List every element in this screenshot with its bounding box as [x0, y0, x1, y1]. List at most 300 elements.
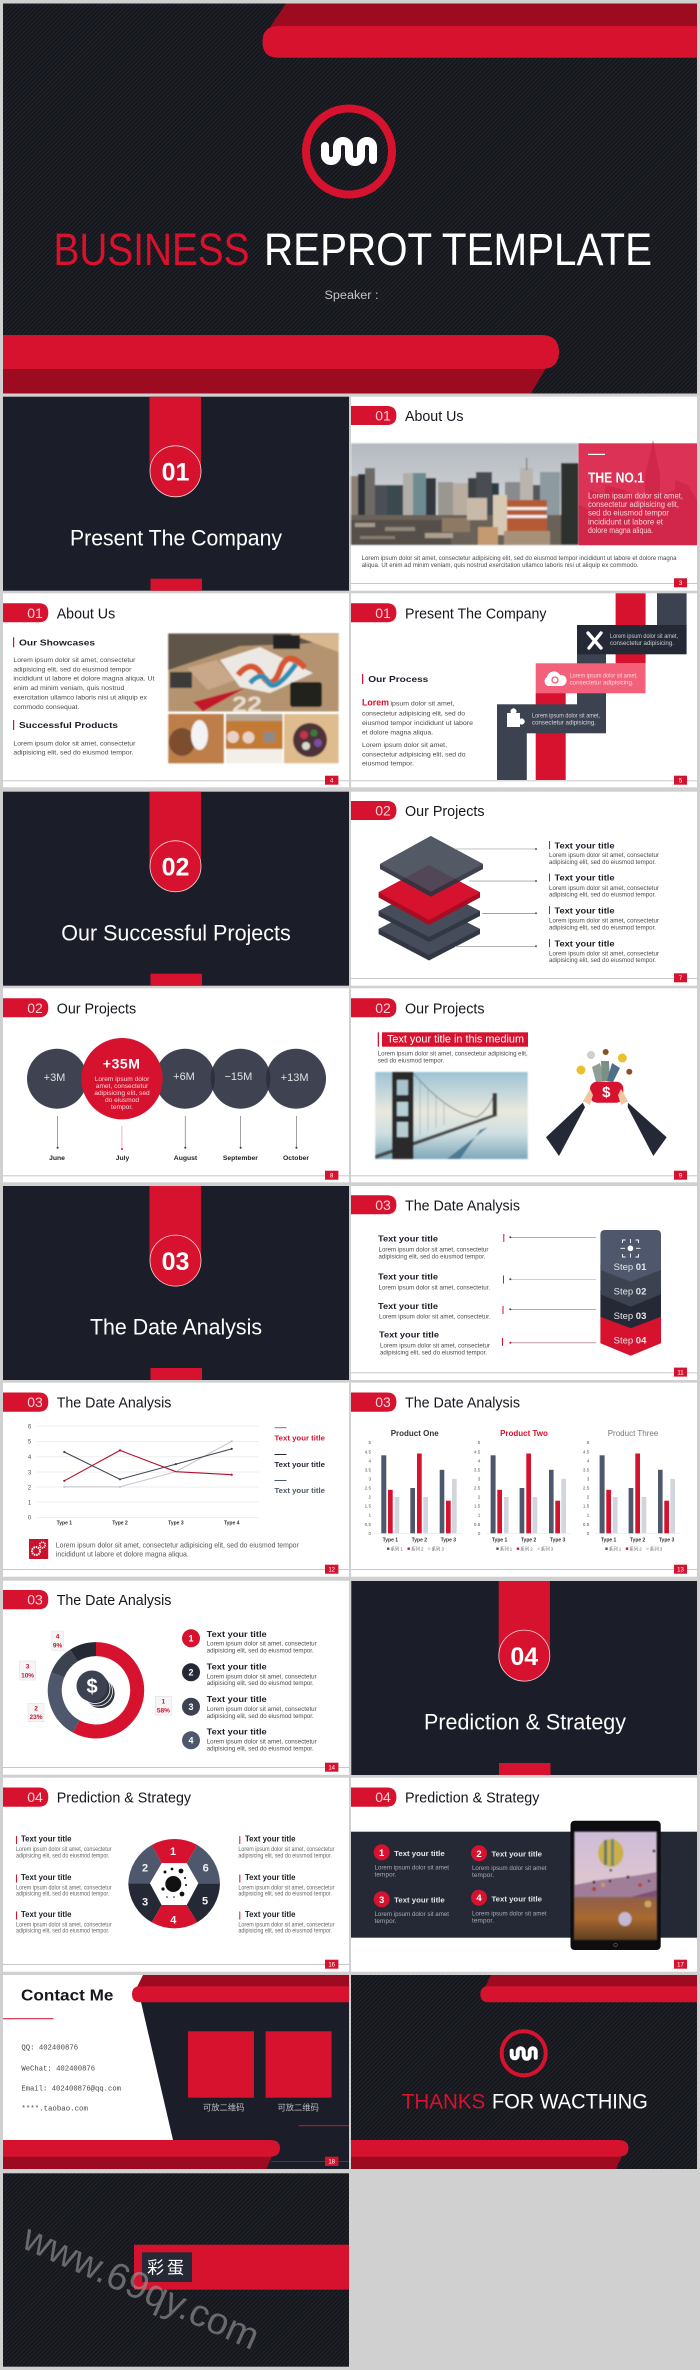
- list item 1: Text your title: [378, 1234, 438, 1244]
- month markers: June: [49, 1155, 65, 1162]
- slide 15: section 04: [351, 1581, 697, 1775]
- list item 1: 1: [188, 1634, 194, 1644]
- line chart: 2: [28, 1485, 32, 1491]
- bar chart: product one: 3: [368, 1476, 371, 1482]
- list item 2: adipisicing elit, sed do eiusmod tempor.: [207, 1680, 314, 1687]
- footer and page number: [351, 1171, 697, 1180]
- slide 2: section 01: [3, 397, 349, 591]
- bar chart: product three: 系列 2: [629, 1546, 642, 1552]
- text block: our process: consectetur adipisicing elit, sed do: [362, 711, 465, 718]
- section title: Prediction & Strategy: [424, 1710, 626, 1735]
- footer and page number: 18: [328, 2160, 336, 2166]
- bar chart: product three: 2: [587, 1495, 590, 1500]
- hexagon wheel: 3: [142, 1897, 148, 1909]
- item 2: [471, 1845, 547, 1879]
- header tab: 03: [27, 1394, 43, 1410]
- icon: coin stack: $: [86, 1676, 98, 1698]
- list item 2: Lorem ipsum dolor sit amet, consectetur.: [378, 1284, 490, 1291]
- heading: Prediction & Strategy: [405, 1790, 540, 1806]
- bar chart: product three: 4: [587, 1458, 590, 1463]
- circle chain: −15M: [224, 1071, 252, 1083]
- list item 1: Lorem ipsum dolor sit amet, consectetur: [207, 1640, 317, 1647]
- icon: logo: [306, 108, 392, 194]
- bar chart: product three: Product Three: [608, 1429, 659, 1438]
- red info panel: [578, 440, 697, 545]
- body text: aliqua. Ut enim ad minim veniam, quis nostrud exercitation ullamco laboris nisi ut aliquip ex commodo.: [362, 562, 639, 569]
- header tab: [351, 998, 396, 1017]
- bar chart: product three: 1.5: [583, 1504, 590, 1509]
- bar chart: product one: 0.5: [365, 1522, 371, 1527]
- step stack: Step 04: [614, 1335, 647, 1346]
- right column items: Text your title: [245, 1834, 296, 1844]
- item 3: tempor.: [374, 1918, 397, 1925]
- bar chart: product one: 0: [368, 1531, 371, 1536]
- list item 1: Lorem ipsum dolor sit amet, consectetur: [549, 852, 660, 859]
- step box: cloud: Lorem ipsum dolor sit amet,: [570, 672, 638, 679]
- bar chart: product two: 2.5: [474, 1486, 481, 1490]
- footer and page number: 13: [677, 1568, 684, 1574]
- slide 7: our projects layers: [351, 792, 697, 986]
- text block: our process: [362, 674, 473, 768]
- list item 2: Lorem ipsum dolor sit amet, consectetur: [549, 885, 660, 892]
- text block: our process: Our Process: [368, 674, 429, 684]
- bar chart: product three: 5: [587, 1440, 590, 1445]
- list item 3: 3: [188, 1702, 194, 1712]
- footer and page number: 8: [330, 1173, 334, 1179]
- bar chart: product two: Type 1: [492, 1538, 508, 1544]
- item 1: Text your title: [394, 1849, 445, 1858]
- header tab: 04: [375, 1789, 391, 1805]
- bar chart: product one: 1.5: [365, 1504, 371, 1509]
- list item 2: [182, 1661, 317, 1687]
- line chart: Type 4: [224, 1521, 240, 1527]
- bar chart: product three: 4.5: [583, 1449, 590, 1454]
- white panel: [3, 1975, 173, 2140]
- bar chart: product one: 系列 3: [432, 1546, 445, 1552]
- hexagon wheel: 2: [142, 1863, 148, 1875]
- bottom red band: [3, 335, 559, 394]
- right column items: Lorem ipsum dolor sit amet, consectetur: [238, 1847, 334, 1853]
- step box: cloud: consectetur adipisicing.: [570, 679, 634, 686]
- step box: tools: consectetur adipisicing.: [610, 640, 674, 647]
- bar chart: product one: 4: [368, 1458, 371, 1463]
- text block: our process: eiusmod tempor incididunt ut labore: [362, 720, 473, 727]
- accent line: [3, 2018, 54, 2019]
- header tab: 03: [375, 1197, 391, 1213]
- body text: Lorem ipsum dolor sit amet, consectetur adipisicing elit,: [378, 1051, 528, 1058]
- header tab: 01: [375, 408, 391, 424]
- slide 3: about us city: [351, 397, 697, 591]
- month markers: [49, 1116, 309, 1162]
- line chart: Type 3: [168, 1521, 184, 1527]
- step box: tools: [577, 625, 687, 654]
- heading: The Date Analysis: [57, 1592, 171, 1609]
- speaker label: Speaker :: [324, 290, 378, 302]
- donut labels: 1: [162, 1698, 166, 1706]
- list item 1: Text your title: [554, 840, 615, 850]
- list item 1: adipisicing elit, sed do eiusmod tempor.: [378, 1253, 486, 1260]
- bar chart: product one: 3.5: [365, 1467, 371, 1472]
- right column items: Text your title: [245, 1909, 296, 1919]
- contact details: ****.taobao.com: [21, 2106, 88, 2114]
- text block: our process: eiusmod tempor.: [362, 761, 414, 768]
- contact details: WeChat: 402400876: [21, 2065, 95, 2073]
- text block: our showcases: adipisicing elit, sed do eiusmod tempor: [13, 666, 132, 673]
- item 4: Lorem ipsum dolor sit amet: [472, 1910, 547, 1917]
- bar chart: product two: 2: [478, 1495, 481, 1500]
- list item 4: Lorem ipsum dolor sit amet, consectetur: [549, 950, 660, 957]
- footer and page number: [271, 2157, 349, 2166]
- item 4: [471, 1890, 547, 1924]
- item 3: [374, 1891, 449, 1925]
- number badge: 04: [510, 1643, 538, 1671]
- header tab: [351, 801, 396, 820]
- header tab: 03: [375, 1394, 391, 1410]
- item 3: Lorem ipsum dolor sit amet: [374, 1911, 449, 1918]
- thumbnail: mouse: [168, 714, 224, 763]
- list item 4: Lorem ipsum dolor sit amet, consectetur: [207, 1738, 317, 1745]
- slide 18: contact me: [3, 1975, 349, 2169]
- circle chain: tempor.: [111, 1104, 133, 1111]
- bar chart: product two: Product Two: [500, 1429, 548, 1438]
- header tab: 02: [375, 802, 391, 818]
- list item 1: [182, 1629, 317, 1654]
- caption: [56, 1540, 299, 1559]
- step stack: Step 02: [614, 1286, 646, 1297]
- hexagon wheel: 1: [170, 1846, 176, 1858]
- QR placeholder 2: 可放二维码: [277, 2103, 319, 2113]
- list item 1: adipisicing elit, sed do eiusmod tempor.: [207, 1647, 314, 1654]
- chart legend: Text your title: [274, 1460, 325, 1469]
- footer and page number: [351, 776, 697, 785]
- footer and page number: [3, 1171, 349, 1180]
- footer and page number: [3, 1565, 349, 1574]
- donut labels: 9%: [53, 1642, 63, 1650]
- item 2: Lorem ipsum dolor sit amet: [472, 1865, 547, 1872]
- bottom tab: [150, 579, 202, 591]
- line chart: Type 2: [112, 1521, 128, 1527]
- bar chart: product two: 5: [478, 1440, 481, 1445]
- contact details: [21, 2044, 122, 2114]
- list item 1: Lorem ipsum dolor sit amet, consectetur: [378, 1246, 489, 1253]
- list item 4: Text your title: [207, 1727, 267, 1737]
- number badge: [150, 841, 201, 892]
- header tab: [3, 998, 48, 1017]
- step graphic: [497, 593, 687, 780]
- header tab: [351, 1392, 396, 1412]
- bar chart: product two: [474, 1429, 571, 1552]
- donut labels: 4: [56, 1634, 60, 1640]
- slide 10: section 03: [3, 1186, 349, 1380]
- slide 11: the date analysis steps: [351, 1186, 697, 1380]
- item 1: 1: [379, 1848, 385, 1859]
- step box: puzzle: [497, 704, 606, 733]
- section title: Our Successful Projects: [61, 920, 291, 945]
- body text: [378, 1051, 528, 1065]
- connector lines: [502, 1234, 596, 1346]
- item 1: tempor.: [374, 1871, 397, 1878]
- bar chart: product three: 0: [587, 1531, 590, 1536]
- circle chain: do eiusmod: [105, 1097, 139, 1104]
- slide 20: easter egg: [3, 2173, 349, 2367]
- list item 3: Text your title: [207, 1694, 267, 1704]
- header tab: 01: [27, 605, 43, 621]
- hexagon wheel: 4: [170, 1914, 177, 1926]
- footer and page number: 9: [679, 1173, 683, 1179]
- red info panel: sed do eiusmod tempor: [588, 509, 669, 518]
- QR placeholder 1: [188, 2031, 254, 2113]
- bar chart: product two: 系列 2: [520, 1546, 533, 1552]
- left column items: Lorem ipsum dolor sit amet, consectetur: [16, 1847, 112, 1853]
- list item 4: adipisicing elit, sed do eiusmod tempor.: [207, 1745, 314, 1752]
- slide 6: section 02: [3, 792, 349, 986]
- footer and page number: 5: [679, 778, 683, 784]
- slide 17: prediction tablet: [351, 1778, 697, 1972]
- heading: Present The Company: [405, 605, 547, 622]
- list item 3: Lorem ipsum dolor sit amet, consectetur: [207, 1706, 317, 1713]
- bar chart: product two: 4: [478, 1458, 481, 1463]
- title: REPROT TEMPLATE: [264, 224, 652, 275]
- icon: target: [620, 1239, 640, 1258]
- bar chart: product three: 2.5: [583, 1486, 590, 1490]
- text block: our showcases: Our Showcases: [19, 638, 95, 648]
- line chart: 1: [28, 1500, 32, 1506]
- line chart: Type 1: [57, 1521, 72, 1527]
- bar chart: product two: Type 2: [521, 1538, 537, 1544]
- list item 3: Text your title: [554, 905, 615, 915]
- ribbon: [499, 1581, 550, 1656]
- list item 4: 4: [188, 1736, 194, 1746]
- caption: Lorem ipsum dolor sit amet, consectetur adipisicing elit, sed do eiusmod tempor: [56, 1540, 299, 1549]
- list item 3: adipisicing elit, sed do eiusmod tempor.: [207, 1713, 314, 1720]
- number badge: [150, 446, 201, 497]
- step stack: Step 03: [614, 1311, 646, 1322]
- item 4: tempor.: [472, 1917, 494, 1924]
- header tab: 01: [375, 605, 391, 621]
- chart legend: Text your title: [274, 1433, 325, 1442]
- right column items: Text your title: [245, 1872, 296, 1882]
- slide 9: our projects bridge: [351, 988, 697, 1182]
- bar chart: product one: 系列 1: [390, 1546, 404, 1552]
- item 1: Lorem ipsum dolor sit amet: [374, 1864, 449, 1871]
- item 3: 3: [379, 1895, 384, 1906]
- label box: [142, 2252, 192, 2282]
- footer and page number: 7: [679, 976, 683, 982]
- list item 2: Lorem ipsum dolor sit amet, consectetur: [207, 1673, 317, 1680]
- circle chain: adipisicing elit, sed: [94, 1090, 150, 1097]
- left column items: Lorem ipsum dolor sit amet, consectetur: [16, 1886, 112, 1892]
- red info panel: THE NO.1: [588, 470, 644, 487]
- red info panel: Lorem ipsum dolor sit amet,: [588, 492, 683, 500]
- left column items: [16, 1834, 112, 1935]
- dark band: [351, 1832, 697, 1938]
- item 2: 2: [476, 1849, 482, 1860]
- bar chart: product one: Type 3: [441, 1538, 456, 1544]
- footer and page number: [351, 1368, 697, 1377]
- footer and page number: 14: [328, 1766, 336, 1772]
- connector lines: [455, 848, 537, 947]
- header tab: [3, 1788, 48, 1807]
- bar chart: product two: 系列 1: [500, 1546, 513, 1552]
- bar chart: product three: Type 2: [630, 1538, 646, 1544]
- text block: our showcases: incididunt ut labore et dolore magna aliqua. Ut: [13, 676, 155, 683]
- icon: money purse: [546, 1049, 667, 1156]
- contact details: Email: 402400876@qq.com: [21, 2086, 122, 2094]
- list item 4: Lorem ipsum dolor sit amet, consectetur: [380, 1342, 491, 1349]
- bar chart: product three: Type 3: [659, 1538, 675, 1544]
- month markers: July: [116, 1155, 130, 1162]
- icon: logo: [502, 2031, 546, 2075]
- slide 4: about us showcases: [3, 593, 349, 787]
- title: BUSINESS: [54, 224, 250, 275]
- step box: tools: Lorem ipsum dolor sit amet,: [610, 633, 678, 640]
- step stack: [600, 1230, 661, 1356]
- header tab: [3, 1590, 48, 1609]
- red info panel: consectetur adipisicing elit,: [588, 500, 679, 509]
- list item 3: [378, 1301, 491, 1321]
- line chart: 0: [28, 1516, 32, 1522]
- circle chain: [27, 1038, 326, 1119]
- list item 2: 2: [188, 1668, 194, 1678]
- desk photo: [168, 634, 339, 717]
- slide 12: the date analysis line chart: [3, 1383, 349, 1577]
- hexagon wheel: 6: [203, 1863, 209, 1875]
- bar chart: product three: 系列 3: [650, 1546, 663, 1552]
- icon: gears: [29, 1539, 48, 1559]
- chart legend: [274, 1427, 325, 1495]
- text block: successful products: Successful Products: [19, 720, 118, 730]
- body text: sed do eiusmod tempor.: [378, 1058, 444, 1065]
- header tab: [351, 603, 396, 622]
- footer and page number: [3, 776, 349, 785]
- header tab: 03: [27, 1592, 43, 1608]
- text block: our process: ipsum dolor sit amet,: [390, 700, 455, 707]
- text block: our process: Lorem ipsum dolor sit amet,: [362, 742, 447, 749]
- heading: About Us: [57, 605, 115, 622]
- section title: Present The Company: [70, 525, 282, 550]
- item 4: Text your title: [492, 1895, 542, 1904]
- list item 3: Lorem ipsum dolor sit amet, consectetur: [549, 917, 660, 924]
- bridge photo: [375, 1072, 528, 1159]
- list item 2: Text your title: [207, 1661, 267, 1671]
- bar chart: product three: 系列 1: [609, 1546, 622, 1552]
- heading: Prediction & Strategy: [57, 1790, 192, 1806]
- header tab: [351, 406, 396, 425]
- thumbnail: bowl: [284, 714, 339, 763]
- left column items: Text your title: [21, 1834, 72, 1844]
- list item 4: [182, 1727, 317, 1752]
- red title bar: Text your title in this medium: [387, 1034, 524, 1046]
- text block: our process: et dolore magna aliqua.: [362, 729, 433, 736]
- watermark: www.69qy.com: [15, 2216, 265, 2359]
- item 2: Text your title: [492, 1850, 542, 1859]
- bottom tab: [150, 974, 202, 986]
- right column items: [238, 1834, 334, 1935]
- slide 16: prediction wheel: [3, 1778, 349, 1972]
- footer and page number: [3, 1763, 349, 1772]
- bar chart: product one: [365, 1429, 462, 1552]
- list item 1: [549, 840, 660, 866]
- number badge: 01: [162, 458, 189, 486]
- header tab: [351, 1788, 396, 1807]
- body text: [362, 555, 677, 569]
- bar chart: product one: 5: [368, 1440, 371, 1445]
- month markers: September: [223, 1155, 258, 1162]
- caption: incididunt ut labore et dolore magna aliqua.: [56, 1550, 189, 1559]
- bar chart: product three: 3.5: [583, 1467, 590, 1472]
- list item 4: adipisicing elit, sed do eiusmod tempor.: [549, 957, 656, 964]
- line chart: 3: [28, 1470, 32, 1476]
- number badge: [499, 1630, 550, 1681]
- thanks title: FOR WACTHING: [492, 2090, 648, 2113]
- left column items: Text your title: [21, 1872, 72, 1882]
- footer and page number: [674, 1960, 687, 1969]
- bar chart: product three: [583, 1429, 680, 1552]
- footer and page number: [351, 578, 697, 587]
- heading: Our Projects: [57, 1000, 136, 1017]
- bar chart: product two: 4.5: [474, 1449, 481, 1454]
- bar chart: product three: 1: [587, 1513, 590, 1518]
- city photo: [351, 443, 578, 545]
- right column items: adipisicing elit, sed do eiusmod tempor.: [238, 1929, 332, 1935]
- label box: 彩蛋: [147, 2258, 187, 2277]
- circle chain: +35M: [103, 1055, 140, 1071]
- ribbon: [150, 1186, 201, 1261]
- bar chart: product two: 3.5: [474, 1467, 481, 1472]
- text block: our showcases: [13, 637, 155, 711]
- bar chart: product one: Product One: [391, 1429, 439, 1438]
- bar chart: product one: 2.5: [365, 1486, 371, 1490]
- bar chart: product two: 0.5: [474, 1522, 481, 1527]
- step stack: Step 01: [614, 1262, 647, 1273]
- number badge: [150, 1235, 201, 1286]
- slide 19: thanks: [351, 1975, 697, 2169]
- top red band: [132, 1975, 349, 2002]
- step box: cloud: [536, 663, 646, 693]
- red bar: [134, 2245, 349, 2290]
- hexagon wheel: 5: [202, 1896, 208, 1908]
- text block: our process: consectetur adipisicing elit, sed do: [362, 751, 466, 758]
- QR placeholder 2: [266, 2031, 332, 2113]
- item 3: Text your title: [394, 1895, 445, 1904]
- list item 4: [379, 1329, 491, 1356]
- list item 2: Text your title: [378, 1271, 438, 1281]
- list item 2: [549, 873, 660, 899]
- right column items: adipisicing elit, sed do eiusmod tempor.: [238, 1853, 332, 1859]
- red info panel: incididunt ut labore et: [588, 517, 664, 526]
- tablet with balloons photo: [570, 1821, 661, 1950]
- bar chart: product one: 系列 2: [411, 1546, 424, 1552]
- donut labels: 2: [34, 1706, 38, 1712]
- chart legend: Text your title: [274, 1486, 325, 1495]
- footer and page number: 4: [330, 778, 334, 784]
- list item 2: Text your title: [554, 873, 615, 883]
- list item 3: Text your title: [378, 1301, 438, 1311]
- footer and page number: 16: [328, 1962, 336, 1968]
- bar chart: product one: 1: [368, 1513, 371, 1518]
- step box: puzzle: Lorem ipsum dolor sit amet,: [532, 713, 600, 720]
- list item 4: Text your title: [379, 1329, 439, 1339]
- heading: Contact Me: [21, 1988, 114, 2005]
- slide 8: our projects circles: [3, 988, 349, 1182]
- title: [54, 224, 652, 275]
- right column items: Lorem ipsum dolor sit amet, consectetur: [238, 1923, 334, 1929]
- list item 1: [378, 1234, 489, 1260]
- bar chart: product two: 1.5: [474, 1504, 481, 1509]
- left column items: adipisicing elit, sed do eiusmod tempor.: [16, 1892, 110, 1898]
- top red band: [480, 1975, 697, 2002]
- bar chart: product two: 0: [478, 1531, 481, 1536]
